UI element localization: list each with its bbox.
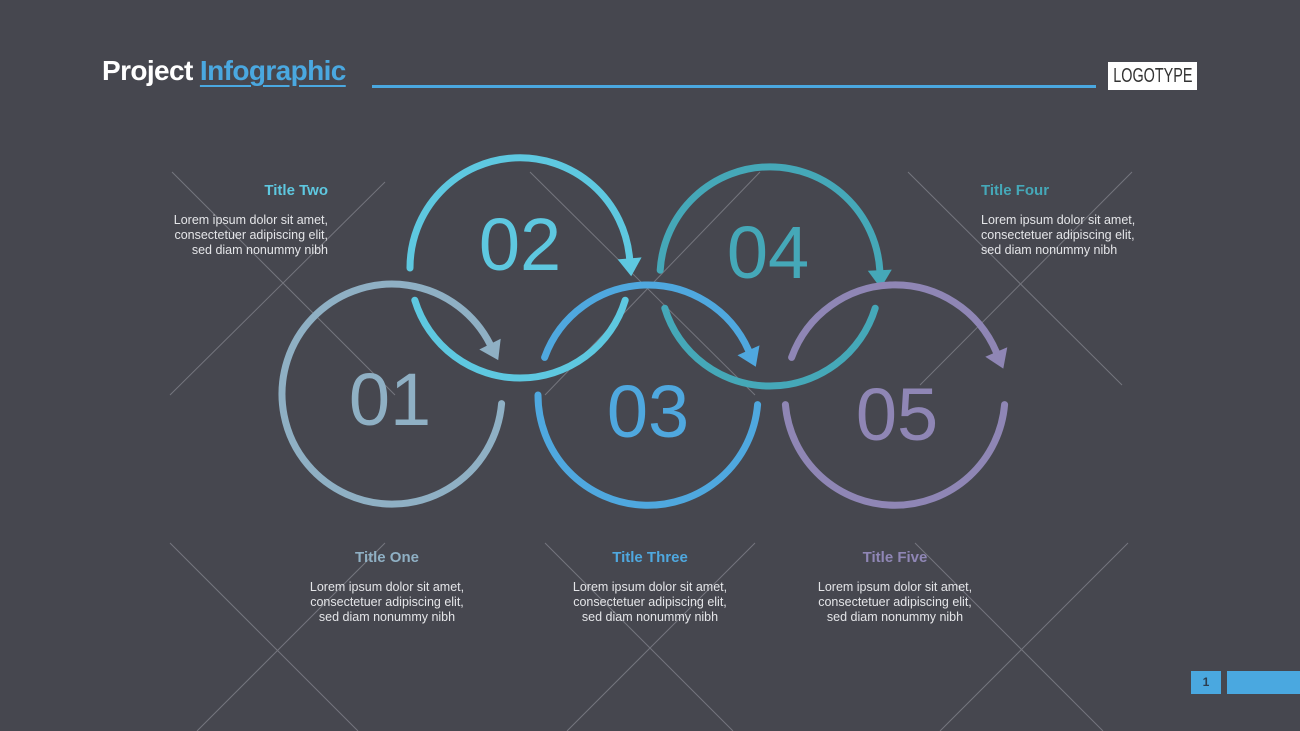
circle 05	[785, 285, 1007, 505]
text: title four	[981, 182, 1135, 257]
header line	[372, 85, 1096, 88]
circle 03	[538, 285, 760, 505]
circle 04: 04	[727, 211, 809, 294]
text: title one: Lorem ipsum dolor sit amet,	[310, 580, 464, 594]
text: title one: Title One	[355, 549, 419, 566]
text: title three	[573, 549, 727, 624]
text: title five: sed diam nonummy nibh	[827, 610, 963, 624]
circle 02: 02	[479, 203, 561, 286]
text: title one	[310, 549, 464, 624]
text: title two	[174, 182, 328, 257]
text: title three: consectetuer adipiscing elit,	[573, 595, 727, 609]
logo	[1108, 62, 1197, 90]
text: title four: Lorem ipsum dolor sit amet,	[981, 213, 1135, 227]
footer bar	[1227, 671, 1300, 694]
text: title two: Title Two	[264, 182, 328, 199]
circle 01	[282, 284, 502, 504]
circle 01: 01	[349, 358, 431, 441]
text: title four: Title Four	[981, 182, 1049, 199]
text: title two: sed diam nonummy nibh	[192, 243, 328, 257]
title: Project Infographic	[102, 55, 346, 86]
text: title three: Lorem ipsum dolor sit amet,	[573, 580, 727, 594]
text: title three: Title Three	[612, 549, 688, 566]
text: title two: Lorem ipsum dolor sit amet,	[174, 213, 328, 227]
page number: 1	[1203, 675, 1209, 689]
logo: LOGOTYPE	[1113, 65, 1192, 87]
text: title one: consectetuer adipiscing elit,	[310, 595, 464, 609]
text: title five: Title Five	[863, 549, 927, 566]
text: title five	[818, 549, 972, 624]
text: title four: sed diam nonummy nibh	[981, 243, 1117, 257]
circle 04	[660, 167, 892, 386]
text: title two: consectetuer adipiscing elit,	[174, 228, 328, 242]
circle 05: 05	[856, 373, 938, 456]
text: title three: sed diam nonummy nibh	[582, 610, 718, 624]
text: title five: Lorem ipsum dolor sit amet,	[818, 580, 972, 594]
text: title five: consectetuer adipiscing elit,	[818, 595, 972, 609]
text: title four: consectetuer adipiscing elit,	[981, 228, 1135, 242]
page number	[1191, 671, 1221, 694]
circle 03: 03	[607, 370, 689, 453]
circle 02	[410, 158, 642, 378]
text: title one: sed diam nonummy nibh	[319, 610, 455, 624]
